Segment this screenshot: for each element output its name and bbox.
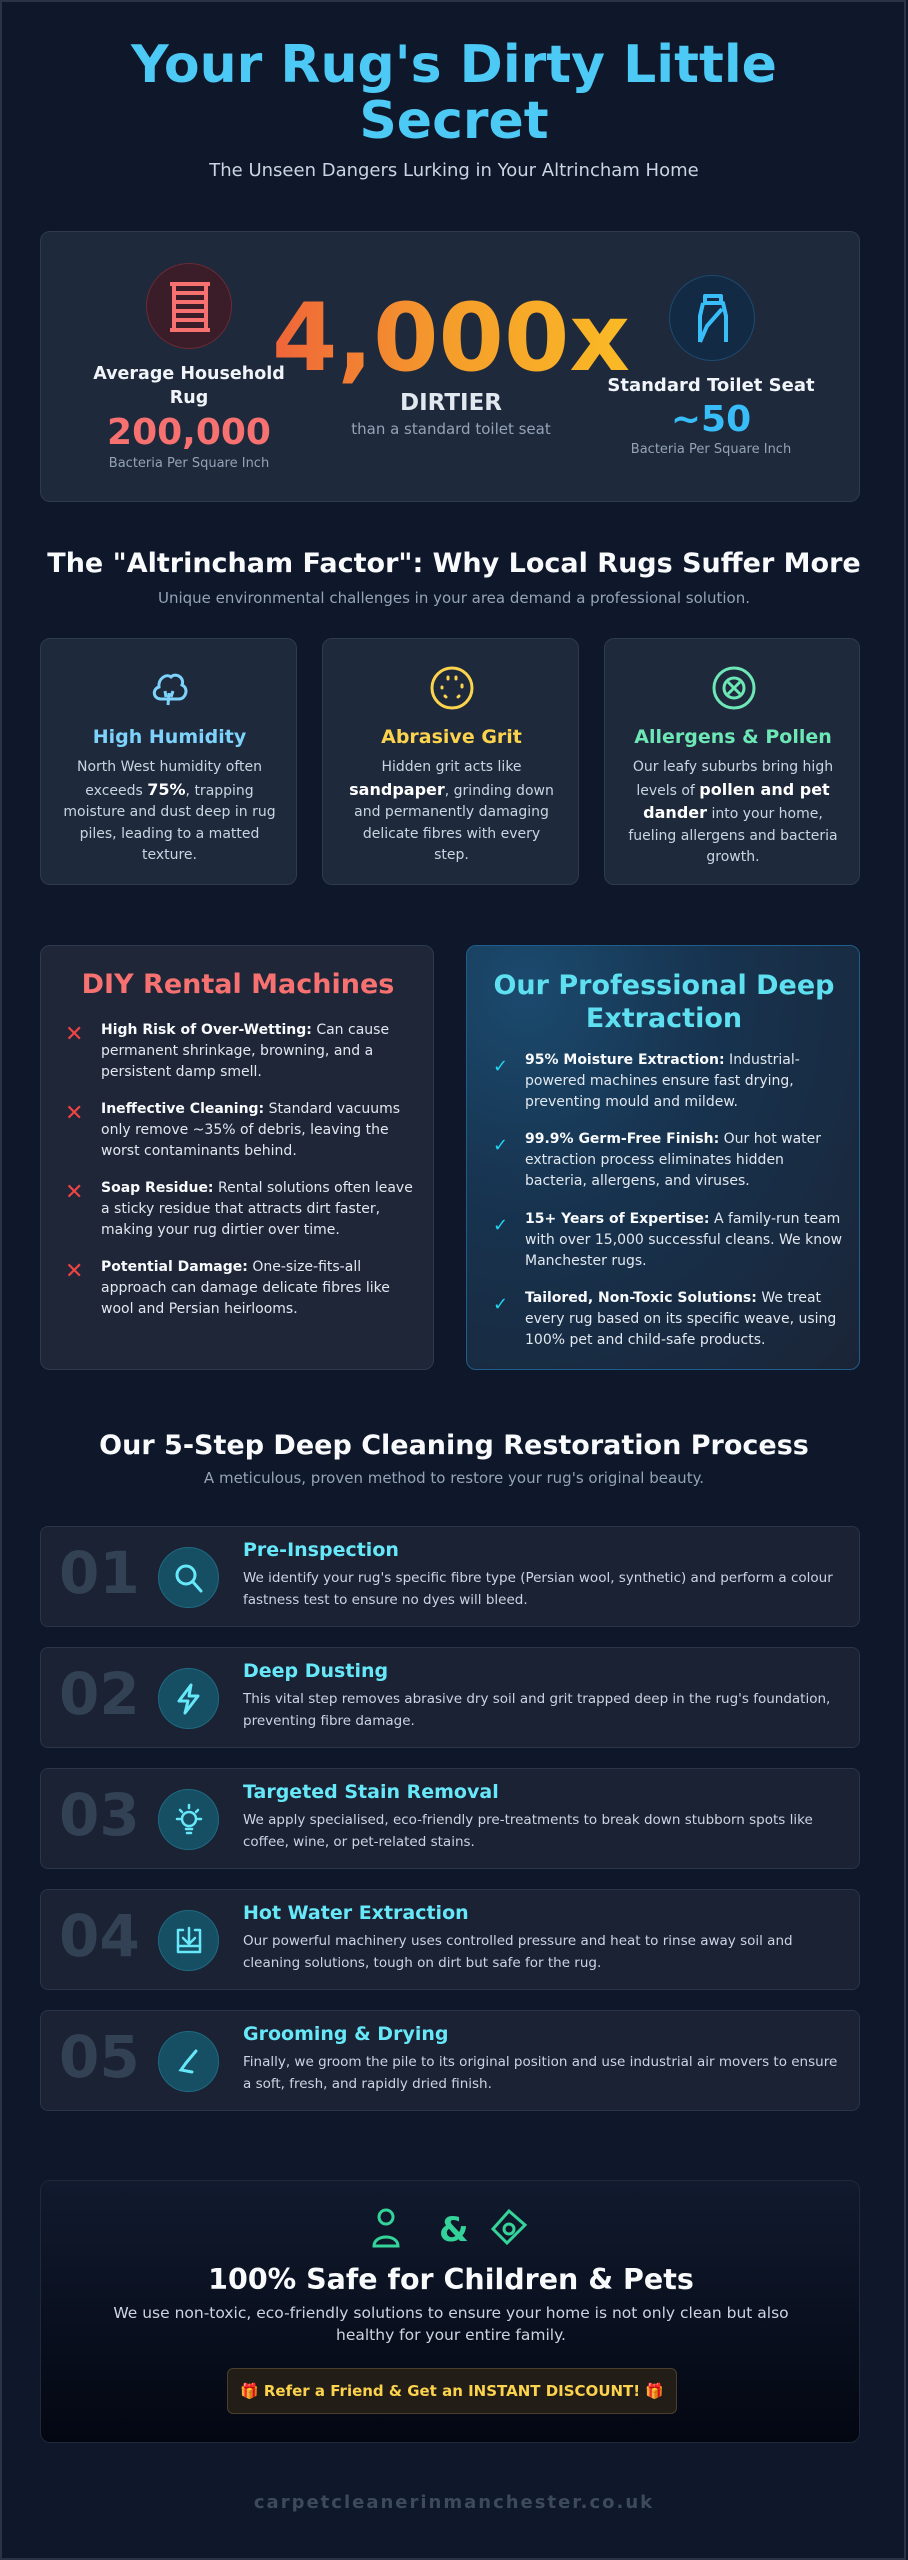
- step 02: [40, 1647, 860, 1748]
- stat: toilet seat: [607, 375, 815, 457]
- item: germ-free: ✓: [493, 1135, 508, 1156]
- button: refer a friend: [227, 2368, 677, 2414]
- stat: household rug: [93, 364, 285, 471]
- stat: toilet seat: Standard Toilet Seat: [607, 375, 815, 396]
- stat: household rug: 200,000: [107, 412, 271, 453]
- step 05: Grooming & Drying: [243, 2023, 448, 2045]
- item: soap residue: ✕: [65, 1180, 83, 1205]
- panel: allergens: Allergens & Pollen: [634, 726, 832, 748]
- step 01: We identify your rug's specific fibre type (Persian wool, synthetic) and perform a colour fastness test to ensure no dyes will bleed.: [243, 1570, 833, 1608]
- step 03: We apply specialised, eco-friendly pre-treatments to break down stubborn spots like coffee, wine, or pet-related stains.: [243, 1812, 813, 1850]
- icon: search: [158, 1547, 219, 1608]
- icons: person & pet: [372, 2208, 528, 2250]
- stat: toilet seat: Bacteria Per Square Inch: [631, 442, 791, 457]
- panel: high humidity: High Humidity: [93, 726, 246, 748]
- item: expertise: 15+ Years of Expertise: A family-run team with over 15,000 successful cleans. We know Manchester rugs.: [525, 1211, 842, 1269]
- step 04: Our powerful machinery uses controlled pressure and heat to rinse away soil and cleaning solutions, tough on dirt but safe for the rug.: [243, 1933, 793, 1971]
- subheading: Unique environmental challenges in your area demand a professional solution.: [158, 589, 750, 607]
- icon: cloud: [152, 674, 188, 706]
- panel: DIY rental machines: [40, 945, 434, 1370]
- panel: allergens: [604, 638, 860, 885]
- stat: household rug: Bacteria Per Square Inch: [109, 456, 269, 471]
- heading: pro: Our Professional Deep: [493, 970, 834, 1001]
- item: expertise: ✓: [493, 1215, 508, 1236]
- step 05: [40, 2010, 860, 2111]
- step 01: 01: [59, 1539, 140, 1607]
- panel: high humidity: [40, 638, 297, 885]
- icon: rug: [146, 263, 232, 349]
- panel: abrasive grit: [322, 638, 579, 885]
- stat: 4000x: DIRTIER: [400, 390, 502, 416]
- stat: household rug: Average Household: [93, 364, 285, 384]
- heading: safe: 100% Safe for Children & Pets: [208, 2263, 694, 2296]
- icon: brush: [158, 2031, 219, 2092]
- step 04: Hot Water Extraction: [243, 1902, 469, 1924]
- title: Your Rug's Dirty Little: [131, 35, 777, 95]
- title: [130, 35, 777, 151]
- step 01: Pre-Inspection: [243, 1539, 399, 1561]
- subtitle: The Unseen Dangers Lurking in Your Altrincham Home: [209, 160, 699, 181]
- icon: grit: [430, 666, 474, 710]
- panel: safe for children and pets: [40, 2180, 860, 2443]
- panel: abrasive grit: Hidden grit acts like sandpaper, grinding down and permanently damaging delicate fibres with every step.: [349, 759, 554, 863]
- item: non-toxic: Tailored, Non-Toxic Solutions: We treat every rug based on its specific weave, using 100% pet and child-safe products.: [525, 1290, 836, 1348]
- title: Secret: [359, 91, 549, 151]
- item: damage: Potential Damage: One-size-fits-all approach can damage delicate fibres like wool and Persian heirlooms.: [101, 1259, 390, 1317]
- step 01: [40, 1526, 860, 1627]
- step 02: Deep Dusting: [243, 1660, 388, 1682]
- step 03: [40, 1768, 860, 1869]
- step 03: 03: [59, 1781, 140, 1849]
- icon: toilet: [669, 275, 755, 361]
- icon: allergen: [712, 666, 756, 710]
- item: over-wetting: High Risk of Over-Wetting: Can cause permanent shrinkage, browning, and a persistent damp smell.: [101, 1022, 389, 1080]
- icon: download tray: [158, 1910, 219, 1971]
- heading: DIY: DIY Rental Machines: [82, 969, 394, 1000]
- item: non-toxic: ✓: [493, 1294, 508, 1315]
- item: soap residue: Soap Residue: Rental solutions often leave a sticky residue that attracts dirt faster, making your rug dirtier over time.: [101, 1180, 413, 1238]
- heading: pro: Extraction: [586, 1003, 742, 1034]
- heading: pro: [493, 970, 834, 1034]
- heading: 5-step process: Our 5-Step Deep Cleaning Restoration Process: [99, 1430, 809, 1461]
- heading: altrincham factor: The "Altrincham Factor": Why Local Rugs Suffer More: [47, 548, 861, 579]
- icons: person & pet: &: [439, 2210, 469, 2250]
- stat: household rug: Rug: [170, 388, 208, 408]
- stat: 4000x: than a standard toilet seat: [351, 420, 551, 438]
- footer: website: carpetcleanerinmanchester.co.uk: [254, 2492, 654, 2513]
- item: moisture: ✓: [493, 1056, 508, 1077]
- icon: bolt: [158, 1668, 219, 1729]
- panel: professional extraction: [466, 945, 860, 1370]
- item: over-wetting: ✕: [65, 1022, 83, 1047]
- panel: stats: [40, 231, 860, 502]
- icon: bulb: [158, 1789, 219, 1850]
- step 03: Targeted Stain Removal: [243, 1781, 499, 1803]
- step 05: Finally, we groom the pile to its original position and use industrial air movers to ensure a soft, fresh, and rapidly dried finish.: [243, 2054, 837, 2092]
- button: refer a friend: 🎁 Refer a Friend & Get an INSTANT DISCOUNT! 🎁: [240, 2382, 664, 2400]
- text: safe: We use non-toxic, eco-friendly solutions to ensure your home is not only clean but also healthy for your entire family.: [113, 2304, 789, 2344]
- panel: high humidity: North West humidity often exceeds 75%, trapping moisture and dust deep in rug piles, leading to a matted texture.: [63, 759, 276, 863]
- step 02: 02: [59, 1660, 140, 1728]
- step 05: 05: [59, 2023, 140, 2091]
- stat: 4000x: 4,000x: [272, 284, 630, 393]
- item: germ-free: 99.9% Germ-Free Finish: Our hot water extraction process eliminates hidden bacteria, allergens, and viruses.: [525, 1131, 821, 1189]
- item: damage: ✕: [65, 1259, 83, 1284]
- stat: toilet seat: ~50: [671, 399, 751, 440]
- item: ineffective: ✕: [65, 1101, 83, 1126]
- item: ineffective: Ineffective Cleaning: Standard vacuums only remove ~35% of debris, leaving the worst contaminants behind.: [101, 1101, 400, 1159]
- step 04: 04: [59, 1902, 140, 1970]
- step 02: This vital step removes abrasive dry soil and grit trapped deep in the rug's foundation, preventing fibre damage.: [243, 1691, 830, 1729]
- panel: abrasive grit: Abrasive Grit: [381, 726, 522, 748]
- step 04: [40, 1889, 860, 1990]
- subheading: A meticulous, proven method to restore your rug's original beauty.: [204, 1469, 704, 1487]
- panel: allergens: Our leafy suburbs bring high levels of pollen and pet dander into your home, fueling allergens and bacteria growth.: [628, 759, 838, 865]
- item: moisture: 95% Moisture Extraction: Industrial-powered machines ensure fast drying, preventing mould and mildew.: [525, 1052, 800, 1110]
